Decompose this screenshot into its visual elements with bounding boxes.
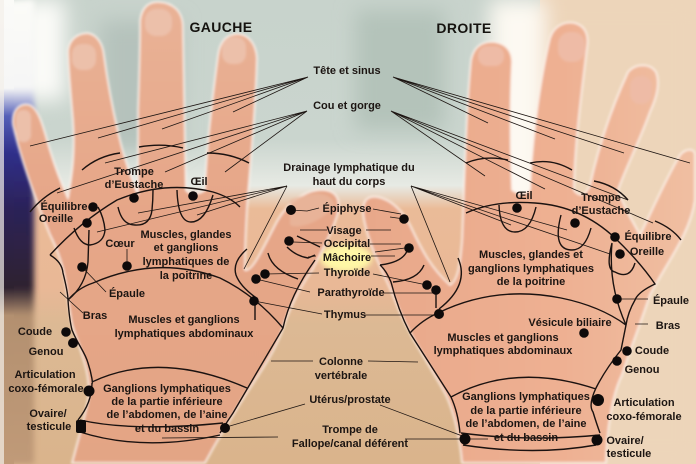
labels: right hand: de la poitrine [497, 276, 565, 288]
labels: right hand: testicule [607, 448, 651, 460]
labels: left hand: Ovaire/ [29, 408, 67, 420]
labels: left hand: Ganglions lymphatiques [103, 383, 231, 395]
labels: right hand: Ganglions lymphatiques [462, 391, 590, 403]
labels: left hand: Oreille [39, 213, 73, 225]
labels: left hand: Genou [29, 346, 63, 358]
labels: centre column: Trompe de [322, 424, 378, 436]
labels: left hand [8, 166, 254, 435]
heading: left hand: GAUCHE [189, 19, 253, 35]
heading: right hand: DROITE [436, 20, 492, 36]
labels: left hand: Muscles, glandes [140, 229, 232, 241]
labels: left hand: de la partie inférieure [111, 396, 223, 408]
labels: right hand: lymphatiques abdominaux [434, 345, 573, 357]
labels: centre column: Thyroïde [324, 267, 370, 279]
labels: left hand: d’Eustache [105, 179, 163, 191]
labels: right hand [434, 190, 689, 460]
leader lines: head and sinuses, left [30, 77, 308, 146]
labels: right hand: Bras [656, 320, 680, 332]
labels: right hand: Épaule [653, 294, 689, 307]
labels: left hand: Bras [83, 310, 107, 322]
labels: left hand: de l’abdomen, de l’aine [106, 409, 228, 421]
labels: right hand: et du bassin [494, 432, 558, 444]
labels: left hand: Équilibre [40, 200, 88, 213]
right hand photo [363, 23, 695, 463]
labels: centre column: Fallope/canal déférent [292, 438, 408, 450]
zone map: right hand [380, 158, 681, 451]
labels: right hand: coxo-fémorale [606, 411, 682, 423]
labels: right hand: Oreille [630, 246, 664, 258]
labels: right hand: Trompe [581, 192, 621, 204]
labels: centre column: Visage [326, 225, 362, 237]
labels: centre column: haut du corps [313, 176, 385, 188]
labels: centre column: Cou et gorge [313, 100, 381, 112]
leader lines: lymphatic drainage, left [97, 186, 287, 269]
labels: right hand: ganglions lymphatiques [468, 263, 594, 275]
labels: right hand: d’Eustache [572, 205, 630, 217]
labels: right hand: Genou [625, 364, 659, 376]
labels: right hand: Équilibre [624, 230, 672, 243]
labels: right hand: de l’abdomen, de l’aine [465, 418, 587, 430]
labels: right hand: Articulation [613, 397, 675, 409]
labels: right hand: Ovaire/ [606, 435, 644, 447]
left hand nails [16, 9, 246, 142]
leader lines: head and sinuses, right [393, 77, 690, 163]
labels: centre column: Parathyroïde [317, 287, 385, 299]
labels: centre column: vertébrale [315, 370, 367, 382]
labels: centre column [283, 65, 415, 450]
labels: left hand: et ganglions [154, 242, 218, 254]
connector lines: reflex points to labels [60, 208, 648, 439]
labels: left hand: la poitrine [160, 270, 212, 282]
labels: left hand: Trompe [114, 166, 154, 178]
left hand thumb shading [290, 194, 334, 226]
labels: centre column: Thymus [324, 309, 366, 321]
labels: centre column: Drainage lymphatique du [283, 162, 415, 174]
labels: right hand: Muscles, glandes et [479, 249, 583, 261]
labels: left hand: Cœur [105, 238, 135, 250]
labels: centre column: Occipital [324, 238, 370, 250]
labels: left hand: Œil [190, 176, 208, 188]
labels: right hand: de la partie inférieure [470, 405, 582, 417]
zone map: left hand [30, 145, 320, 443]
labels: centre column: Colonne [319, 356, 363, 368]
labels: left hand: Articulation [14, 369, 76, 381]
labels: left hand: lymphatiques abdominaux [115, 328, 254, 340]
labels: right hand: Vésicule biliaire [528, 317, 612, 329]
labels: left hand: et du bassin [135, 423, 199, 435]
labels: left hand: lymphatiques de [143, 256, 229, 268]
labels: centre column: Épiphyse [323, 202, 371, 215]
labels: left hand: Coude [18, 326, 52, 338]
labels: right hand: Coude [635, 345, 669, 357]
labels: centre column: Tête et sinus [313, 65, 381, 77]
labels: right hand: Œil [515, 190, 533, 202]
labels: left hand: Épaule [109, 287, 145, 300]
labels: left hand: coxo-fémorale [8, 383, 84, 395]
labels: left hand: Muscles et ganglions [128, 314, 240, 326]
leader lines: neck and throat, right [391, 111, 653, 223]
labels: centre column: Utérus/prostate [309, 394, 391, 406]
labels: right hand: Muscles et ganglions [447, 332, 559, 344]
leader lines: lymphatic drainage, right [411, 186, 610, 282]
reflex points: right hand [399, 203, 632, 446]
labels: left hand: testicule [27, 421, 71, 433]
leader lines: neck and throat, left [57, 111, 307, 193]
reflex points: left hand [61, 191, 296, 433]
labels: centre column: Mâchoire [323, 252, 371, 264]
right hand nails [478, 32, 652, 104]
left hand photo [13, 2, 339, 463]
